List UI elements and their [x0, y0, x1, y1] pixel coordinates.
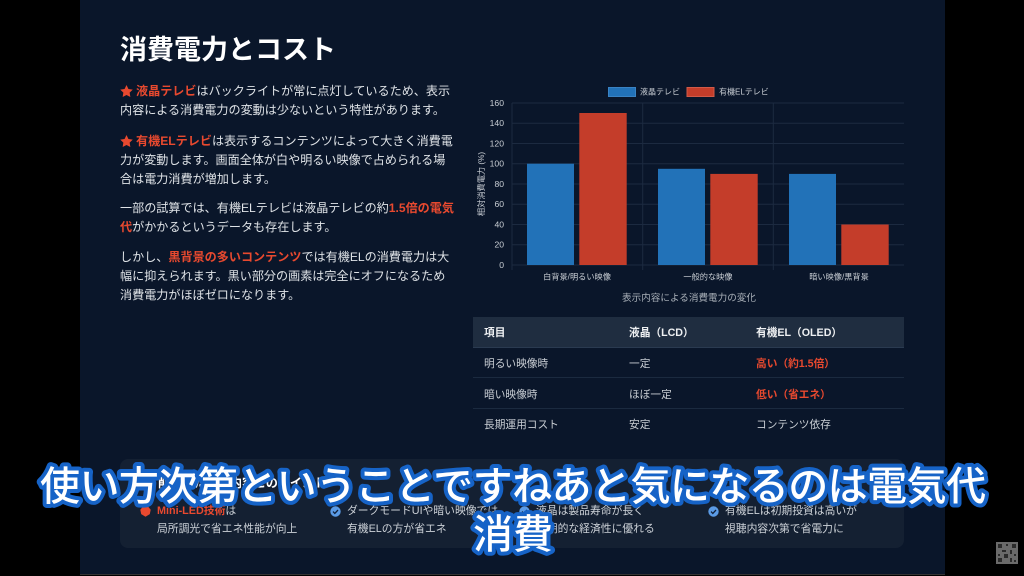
text block: OLED: 有機ELテレビは表示するコンテンツによって大きく消費電 [136, 134, 453, 148]
y axis labels: 60 [494, 199, 504, 209]
comparison table: 一定 [629, 358, 650, 370]
text block: estimate: 代がかかるというデータも存在します。 [120, 220, 336, 234]
comparison table: コンテンツ依存 [756, 418, 831, 430]
title: 消費電力とコスト [120, 35, 336, 65]
legend: 液晶テレビ [640, 88, 680, 96]
y axis labels [490, 98, 504, 270]
subtitle caption: 消費 [473, 513, 553, 557]
text block: LCD: 内容による消費電力の変動は少ないという特性があります。 [120, 102, 445, 116]
item: dark mode [330, 504, 498, 534]
icon: QR code [996, 542, 1018, 564]
category labels: 一般的な映像 [683, 272, 733, 282]
category labels: 白背景/明るい映像 [543, 272, 611, 282]
comparison table: 安定 [629, 418, 650, 430]
comparison table: 暗い映像時 [484, 388, 537, 400]
chart caption: 表示内容による消費電力の変化 [622, 292, 756, 304]
text block: LCD: 液晶テレビはバックライトが常に点灯しているため、表示 [136, 84, 450, 98]
legend: 有機ELテレビ [719, 86, 769, 96]
panel: usage points [120, 459, 904, 548]
comparison table: ほぼ一定 [629, 388, 672, 400]
item: initial cost: 視聴内容次第で省電力に [725, 522, 844, 534]
panel heading: 削減のための内容とのポイント [158, 476, 326, 490]
text block: dark content: 消費電力がほぼゼロになります。 [120, 288, 300, 302]
bar chart [476, 86, 904, 304]
text block: dark content: 幅に抑えられます。黒い部分の画素は完全にオフになるため [120, 268, 445, 282]
item: dark mode: ダークモードUIや暗い映像では [347, 505, 498, 517]
y axis labels: 80 [494, 179, 504, 189]
text block: OLED: 合は電力消費が増加します。 [120, 172, 276, 186]
comparison table [473, 317, 904, 430]
subtitle caption: 使い方次第ということですねあと気になるのは電気代 [40, 465, 986, 509]
item: Mini-LED [140, 504, 297, 534]
text block: estimate: 一部の試算では、有機ELテレビは液晶テレビの約1.5倍の電気 [120, 201, 454, 215]
comparison table: 液晶（LCD） [629, 327, 694, 339]
text block: dark content: しかし、黒背景の多いコンテンツでは有機ELの消費電力は大 [120, 250, 449, 264]
text block: dark content [120, 250, 449, 302]
item: initial cost: 有機ELは初期投資は高いが [725, 505, 857, 517]
y axis labels: 140 [490, 118, 504, 128]
item: lifespan [519, 504, 655, 534]
text block: OLED [120, 134, 453, 186]
comparison table: 低い（省エネ） [756, 388, 831, 400]
comparison table: 高い（約1.5倍） [756, 358, 835, 370]
item: Mini-LED: 局所調光で省エネ性能が向上 [157, 522, 297, 534]
y axis labels: 100 [490, 159, 504, 169]
item: lifespan: 液晶は製品寿命が長く [536, 505, 644, 517]
comparison table: 明るい映像時 [484, 358, 548, 370]
text block: estimate [120, 201, 454, 234]
y axis labels: 0 [499, 260, 504, 270]
y axis labels: 40 [494, 220, 504, 230]
subtitle caption [36, 462, 989, 557]
text block: LCD [120, 84, 450, 116]
y axis labels: 20 [494, 240, 504, 250]
item: initial cost [708, 504, 857, 534]
item: Mini-LED: Mini-LED技術は [157, 505, 236, 517]
y axis labels: 160 [490, 98, 504, 108]
bars [527, 164, 836, 265]
comparison table: 項目 [484, 327, 505, 339]
category labels [543, 272, 869, 282]
item: dark mode: 有機ELの方が省エネ [347, 522, 447, 534]
text block: OLED: 力が変動します。画面全体が白や明るい映像で占められる場 [120, 152, 445, 166]
category labels: 暗い映像/黒背景 [809, 272, 869, 282]
y axis title: 相対消費電力 (%) [476, 152, 486, 216]
comparison table: 有機EL（OLED） [756, 327, 842, 339]
y axis labels: 120 [490, 138, 504, 148]
comparison table: 長期運用コスト [484, 418, 559, 430]
table header [473, 317, 904, 348]
item: lifespan: 長期的な経済性に優れる [536, 522, 655, 534]
legend [608, 86, 769, 96]
